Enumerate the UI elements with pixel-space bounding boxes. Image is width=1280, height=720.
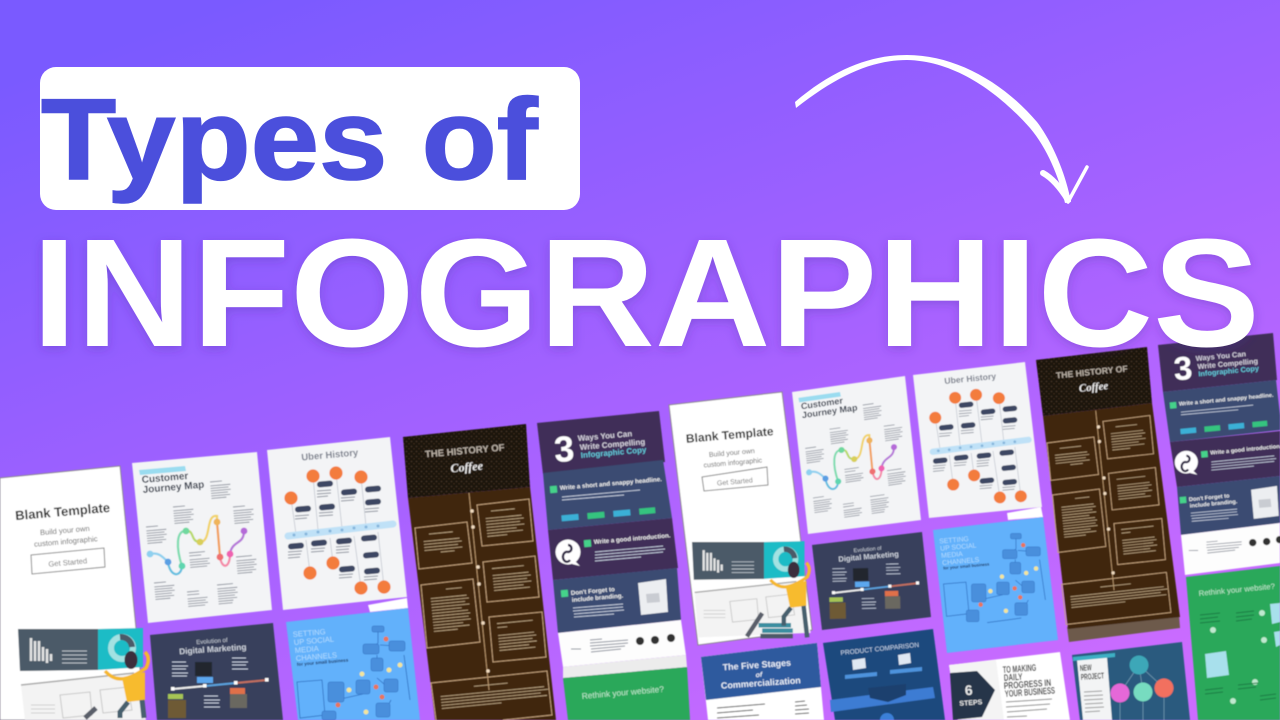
panel: blank template card (left) xyxy=(0,466,145,720)
panel: five stages of commercialization xyxy=(701,643,824,720)
chart: coffee timeline xyxy=(415,493,552,720)
heading: customer journey map: Journey Map xyxy=(142,480,205,496)
heading: setting up social media channels: SETTING xyxy=(292,627,326,639)
heading: 3 ways you can write compelling infographic copy: Write Compelling xyxy=(579,437,646,452)
section 3: include branding xyxy=(1179,486,1279,521)
heading: setting up social media channels xyxy=(292,627,349,667)
heading: to making daily progress xyxy=(1002,662,1055,699)
panel: digital marketing timeline (left) xyxy=(150,623,283,720)
section 2: good introduction xyxy=(556,532,671,566)
heading: 3 ways you can write compelling infographic copy: Write Compelling xyxy=(1197,356,1258,371)
button: get started xyxy=(31,548,105,574)
panel: customer journey map (left) xyxy=(132,452,272,623)
panel: product comparison xyxy=(823,629,945,720)
heading: setting up social media channels: CHANNELS xyxy=(942,557,980,567)
heading: setting up social media channels: for your small business xyxy=(943,561,990,571)
text: rethink your website: Rethink your website? xyxy=(1198,582,1275,598)
icon: 6 steps arrow: 6 xyxy=(964,682,973,698)
heading: new project: PROJECT xyxy=(1081,672,1105,682)
heading: 3 ways you can write compelling infographic copy: 3 xyxy=(553,428,576,470)
chart: journey path xyxy=(147,516,247,574)
section 2: good introduction: Write a good introduction. xyxy=(1210,444,1280,457)
title: infographics: INFOGRAPHICS xyxy=(32,208,1260,379)
template gallery xyxy=(0,333,1280,720)
heading: to making daily progress: PROGRESS IN xyxy=(1003,678,1052,691)
panel: uber history (right) xyxy=(913,362,1043,520)
text: body lines xyxy=(717,701,809,718)
heading: customer journey map: Customer xyxy=(141,471,189,486)
text: blank template subtitle xyxy=(703,448,763,470)
heading: setting up social media channels: UP SOCIAL xyxy=(293,635,334,647)
heading: product comparison: PRODUCT COMPARISON xyxy=(840,642,920,657)
heading: customer journey map xyxy=(800,395,858,420)
text: journey stage notes xyxy=(805,401,907,519)
text: blank template subtitle: custom infographic xyxy=(703,457,763,470)
title tag: types of: Types of xyxy=(41,76,538,204)
illustration: dashboard and person (left) xyxy=(18,628,148,720)
section 1: short and snappy headline xyxy=(550,476,662,521)
icon: 6 steps arrow xyxy=(950,671,995,720)
chart: coffee timeline xyxy=(1047,410,1171,625)
section 3: include branding: include branding. xyxy=(1190,499,1238,510)
panel: 3 ways infographic copy (right) xyxy=(1158,333,1280,720)
heading: 3 ways you can write compelling infographic copy: Infographic Copy xyxy=(580,445,647,460)
section 1: short and snappy headline: Write a short and snappy headline. xyxy=(560,476,662,492)
panel: uber history (left) xyxy=(267,437,408,612)
heading: setting up social media channels: SETTING xyxy=(939,536,969,546)
chart: social media flowchart xyxy=(943,533,1046,623)
section 1: short and snappy headline xyxy=(1170,393,1274,434)
panel: customer journey map (right) xyxy=(792,376,921,534)
icon: laptops xyxy=(852,653,911,670)
chart: green flow diagram xyxy=(1200,603,1280,704)
section 2: good introduction: Write a good introduction. xyxy=(594,532,671,546)
section 3: include branding: include branding. xyxy=(572,593,624,604)
text: blank template subtitle: Build your own xyxy=(709,448,755,459)
heading: five stages: Commercialization xyxy=(721,675,801,691)
icon: 6 steps arrow: STEPS xyxy=(959,699,983,708)
panel: 6 steps daily progress xyxy=(949,652,1070,720)
text: rethink your website: Rethink your website? xyxy=(581,684,665,701)
heading: blank template: Blank Template xyxy=(15,500,111,523)
panel: 3 ways infographic copy (left) xyxy=(537,411,690,720)
footer: contact and social icons xyxy=(1189,536,1280,553)
heading: customer journey map xyxy=(141,471,205,496)
illustration: dashboard and person (center) xyxy=(692,541,811,638)
footer: contact and social icons xyxy=(571,634,675,652)
heading: to making daily progress: YOUR BUSINESS xyxy=(1004,685,1055,699)
panel: setting up social media channels (right) xyxy=(933,517,1058,653)
heading: uber history: Uber History xyxy=(944,371,997,386)
heading: 3 ways you can write compelling infographic copy: Ways You Can xyxy=(1195,349,1247,363)
heading: setting up social media channels xyxy=(939,536,990,571)
heading: five stages xyxy=(721,658,801,691)
heading: 3 ways you can write compelling infographic copy: Ways You Can xyxy=(577,429,633,443)
panel: setting up social media channels (left) xyxy=(286,608,420,720)
panel: history of coffee (right) xyxy=(1036,347,1180,642)
panel: blank template card (center) xyxy=(669,392,812,645)
heading: customer journey map: Customer xyxy=(800,395,844,411)
panel: digital marketing timeline (right) xyxy=(812,532,931,630)
heading: digital marketing: Evolution of xyxy=(853,546,882,554)
button: get started: Get Started xyxy=(717,477,753,488)
heading: 3 ways you can write compelling infographic copy xyxy=(1172,349,1260,388)
heading: to making daily progress: DAILY xyxy=(1003,671,1023,683)
section 1: short and snappy headline: Write a short and snappy headline. xyxy=(1179,393,1274,408)
heading: setting up social media channels: for your small business xyxy=(297,657,349,667)
heading: 3 ways you can write compelling infographic copy: 3 xyxy=(1173,350,1194,388)
heading: the history of coffee: THE HISTORY OF xyxy=(425,443,505,460)
text: blank template subtitle: custom infographic xyxy=(34,534,98,549)
heading: 3 ways you can write compelling infographic copy xyxy=(553,428,647,470)
text: body lines xyxy=(1006,699,1052,717)
section 2: good introduction xyxy=(1175,444,1280,475)
text: journey stage notes xyxy=(146,480,257,606)
heading: setting up social media channels: MEDIA xyxy=(294,644,320,655)
chart: project circles xyxy=(1110,656,1174,720)
heading: uber history: Uber History xyxy=(301,447,359,463)
heading: digital marketing: Evolution of xyxy=(196,638,228,646)
heading: five stages: The Five Stages xyxy=(722,658,791,672)
text: blank template subtitle xyxy=(34,524,98,549)
heading: digital marketing: Digital Marketing xyxy=(179,642,247,656)
heading: the history of coffee: Coffee xyxy=(1079,380,1109,395)
heading: five stages: of xyxy=(755,672,763,679)
heading: the history of coffee: Coffee xyxy=(450,459,484,475)
heading: digital marketing: Digital Marketing xyxy=(838,549,900,564)
panel: history of coffee (left) xyxy=(403,424,556,720)
heading: setting up social media channels: UP SOCIAL xyxy=(940,542,977,553)
heading: 3 ways you can write compelling infographic copy: Infographic Copy xyxy=(1198,364,1260,378)
section 3: include branding xyxy=(561,579,668,617)
panel: new project xyxy=(1072,642,1190,720)
label tags xyxy=(845,667,922,679)
chart: marketing timeline xyxy=(829,563,920,619)
chart: uber timeline xyxy=(929,388,1029,504)
heading: the history of coffee xyxy=(425,443,505,475)
heading: setting up social media channels: CHANNELS xyxy=(295,650,337,663)
text: blank template subtitle: Build your own xyxy=(40,524,90,537)
heading: setting up social media channels: MEDIA xyxy=(941,551,964,560)
heading: new project xyxy=(1080,664,1105,682)
button: get started xyxy=(702,467,768,491)
heading: new project: NEW xyxy=(1080,664,1092,673)
arrow: curved white arrow xyxy=(795,55,1087,203)
chart: journey path xyxy=(806,433,897,491)
heading: customer journey map: Journey Map xyxy=(801,402,858,420)
heading: the history of coffee xyxy=(1055,363,1128,395)
chart: social media flowchart xyxy=(297,626,410,720)
chart: marketing timeline xyxy=(168,658,268,718)
heading: the history of coffee: THE HISTORY OF xyxy=(1056,363,1128,381)
section 3: include branding: Don't Forget to xyxy=(1189,493,1230,503)
heading: to making daily progress: TO MAKING xyxy=(1002,662,1037,675)
icon: magnifier xyxy=(880,713,894,720)
button: get started: Get Started xyxy=(48,556,88,569)
heading: blank template: Blank Template xyxy=(685,424,774,446)
section 3: include branding: Don't Forget to xyxy=(571,586,615,597)
chart: uber timeline xyxy=(284,466,393,595)
